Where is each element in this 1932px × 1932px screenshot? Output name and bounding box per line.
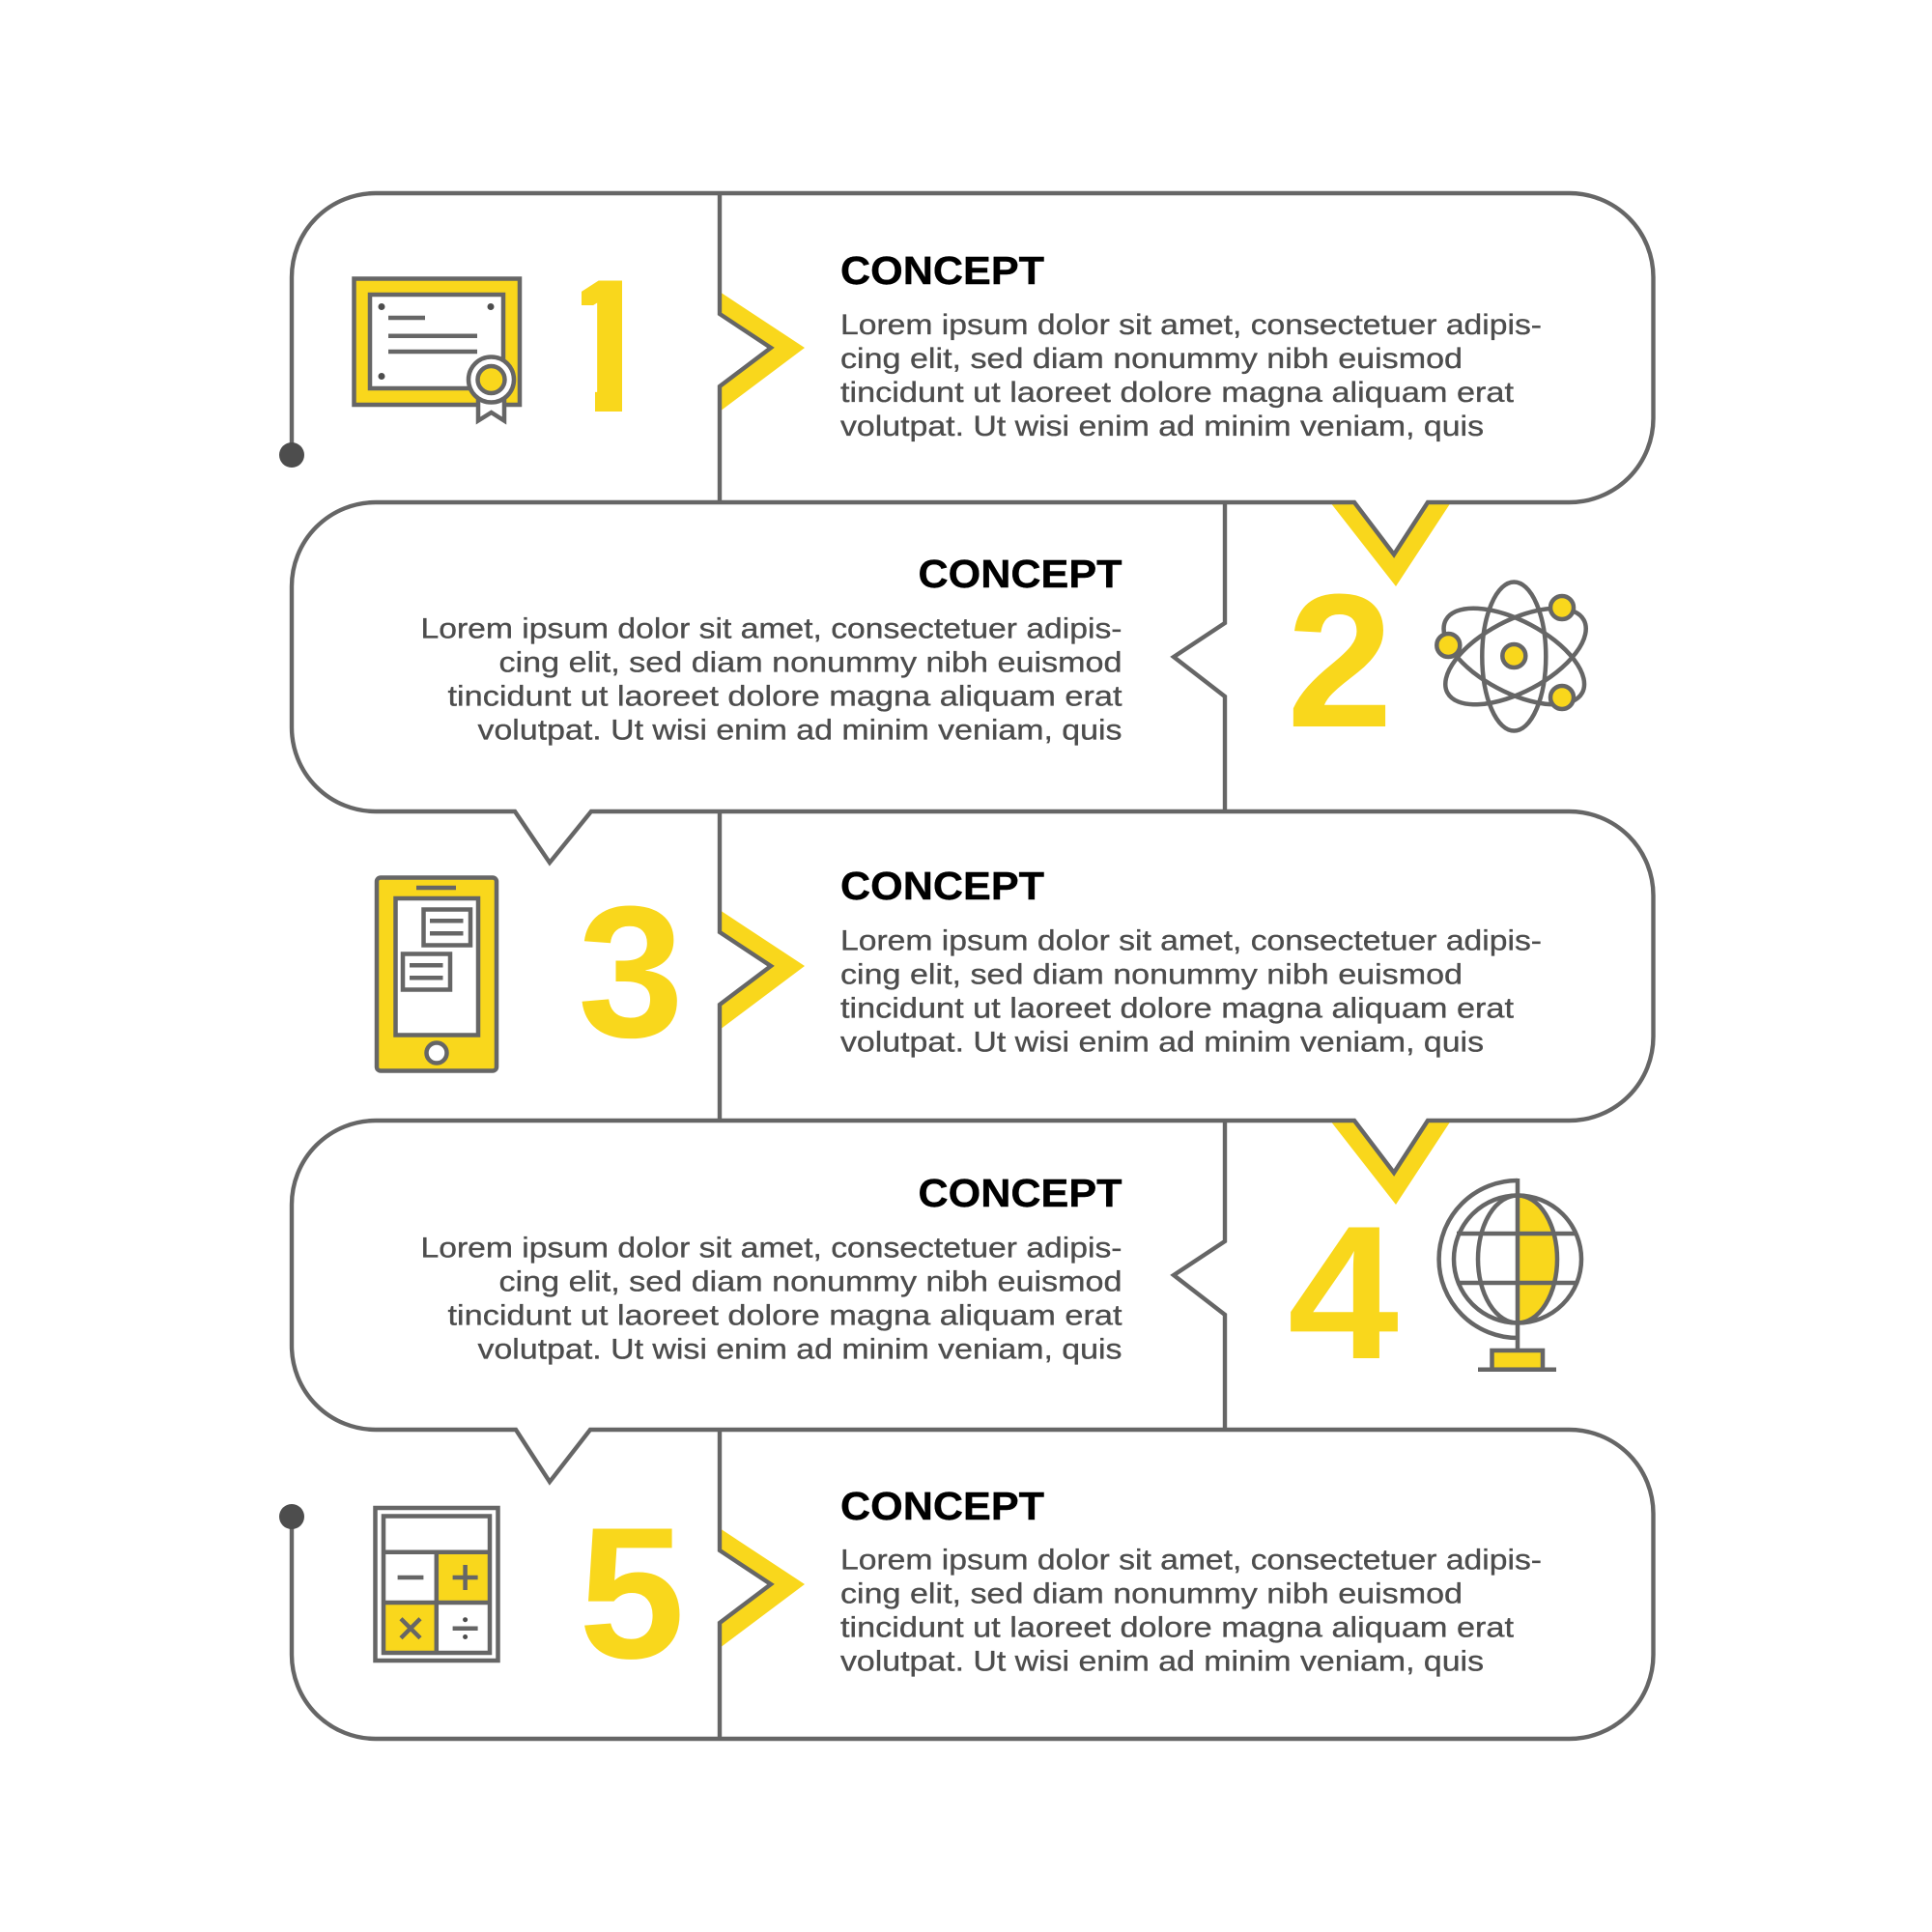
text block step 5: Lorem ipsum dolor sit amet, consectetuer adipis- <box>840 1544 1542 1577</box>
text block step 5: tincidunt ut laoreet dolore magna aliquam erat <box>840 1611 1515 1644</box>
text block step 1: Lorem ipsum dolor sit amet, consectetuer adipis- <box>840 309 1542 341</box>
heading step 5: CONCEPT <box>840 1484 1044 1528</box>
text block step 4: tincidunt ut laoreet dolore magna aliquam erat <box>448 1300 1122 1331</box>
text block step 2: Lorem ipsum dolor sit amet, consectetuer adipis- <box>421 612 1122 645</box>
text block step 4 <box>421 1233 1122 1366</box>
text block step 5 <box>840 1544 1542 1677</box>
panel: step 3 <box>377 811 1654 1205</box>
text block step 3 <box>840 925 1542 1059</box>
number 3: 3 <box>578 867 684 1077</box>
number 2: 2 <box>1287 554 1393 767</box>
text block step 2: cing elit, sed diam nonummy nibh euismod <box>498 647 1122 678</box>
icon: globe <box>1439 1179 1581 1370</box>
text block step 2 <box>421 612 1122 746</box>
arrow: yellow tail down to step 2 <box>1330 502 1451 586</box>
text block step 2: tincidunt ut laoreet dolore magna aliquam erat <box>448 680 1122 713</box>
end dot <box>279 1504 304 1529</box>
text block step 4: Lorem ipsum dolor sit amet, consectetuer adipis- <box>421 1233 1122 1264</box>
text block step 1: volutpat. Ut wisi enim ad minim veniam, quis <box>840 411 1484 442</box>
arrow: yellow chevron step 3 <box>720 910 805 1030</box>
outline: step 3 frame <box>720 811 1654 1173</box>
heading step 3: CONCEPT <box>840 864 1044 908</box>
heading step 4: CONCEPT <box>918 1171 1122 1215</box>
panel: step 1 <box>279 193 1654 586</box>
icon: calculator <box>375 1508 498 1661</box>
arrow: yellow chevron step 1 <box>720 292 805 412</box>
icon: atom <box>1429 582 1601 730</box>
text block step 5: volutpat. Ut wisi enim ad minim veniam, quis <box>840 1646 1484 1677</box>
number 1: 1 <box>553 240 659 452</box>
text block step 3: cing elit, sed diam nonummy nibh euismod <box>840 958 1463 991</box>
icon: certificate <box>354 278 520 421</box>
number 5: 5 <box>579 1489 685 1698</box>
text block step 2: volutpat. Ut wisi enim ad minim veniam, quis <box>477 715 1122 746</box>
text block step 1: cing elit, sed diam nonummy nibh euismod <box>840 343 1463 375</box>
panel: step 2 <box>292 502 1601 863</box>
text block step 1 <box>840 309 1542 442</box>
start dot <box>279 442 304 468</box>
outline: step 1 frame <box>292 193 1654 554</box>
heading step 2: CONCEPT <box>918 552 1122 596</box>
text block step 3: Lorem ipsum dolor sit amet, consectetuer adipis- <box>840 925 1542 956</box>
panel: step 5 <box>279 1430 1654 1739</box>
text block step 5: cing elit, sed diam nonummy nibh euismod <box>840 1578 1463 1609</box>
text block step 3: tincidunt ut laoreet dolore magna aliquam erat <box>840 993 1515 1024</box>
heading step 1: CONCEPT <box>840 248 1044 293</box>
text block step 1: tincidunt ut laoreet dolore magna aliquam erat <box>840 377 1515 409</box>
outline: step 5 frame <box>292 1430 1654 1739</box>
outline: step 2 frame <box>292 502 1225 863</box>
arrow: yellow tail down to step 4 <box>1330 1121 1451 1205</box>
outline: step 4 frame <box>292 1121 1225 1482</box>
arrow: yellow chevron step 5 <box>720 1528 805 1648</box>
text block step 4: volutpat. Ut wisi enim ad minim veniam, quis <box>477 1333 1122 1366</box>
icon: smartphone <box>377 877 497 1070</box>
panel: step 4 <box>292 1121 1581 1482</box>
number 4: 4 <box>1288 1186 1399 1399</box>
text block step 4: cing elit, sed diam nonummy nibh euismod <box>498 1265 1122 1298</box>
text block step 3: volutpat. Ut wisi enim ad minim veniam, quis <box>840 1026 1484 1059</box>
